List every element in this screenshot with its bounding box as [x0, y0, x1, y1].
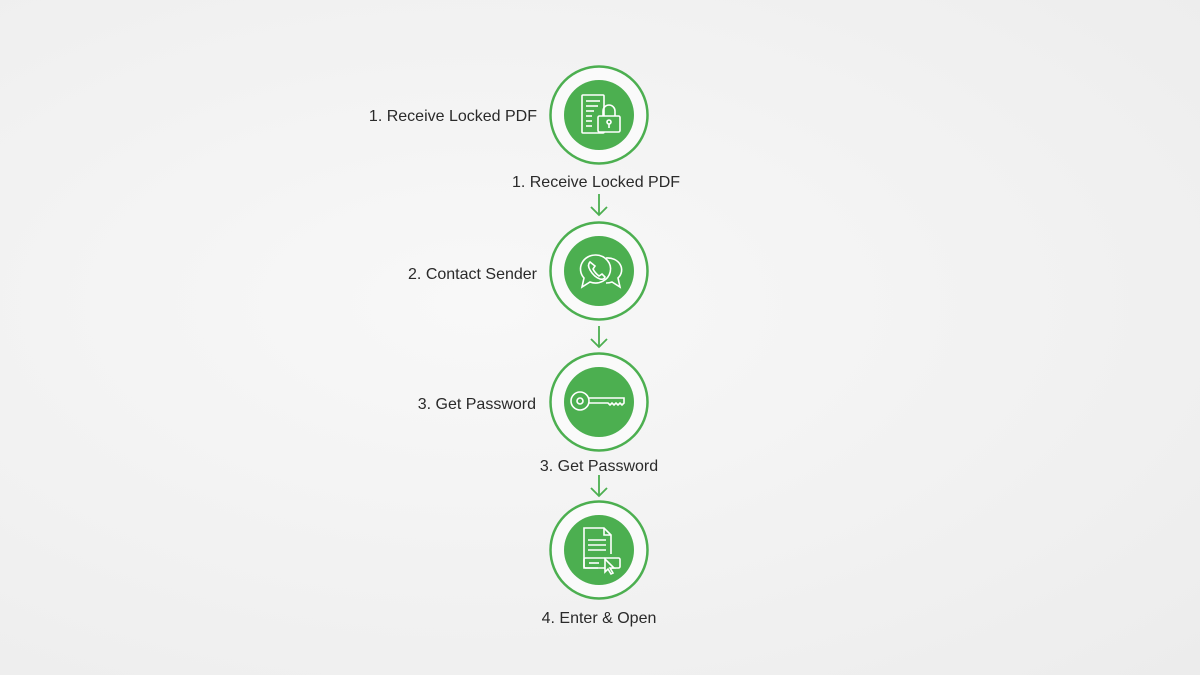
step 2: contact sender [408, 222, 648, 320]
label: step 2: 2. Contact Sender [408, 266, 538, 283]
arrow 3 [591, 475, 607, 496]
icon circle: locked document [550, 66, 648, 164]
label: step 3 left: 3. Get Password [418, 396, 536, 413]
label: step 4: 4. Enter & Open [542, 610, 656, 627]
icon circle: chat phone [550, 222, 648, 320]
label: step 1 below: 1. Receive Locked PDF [512, 174, 680, 191]
step 1: receive locked pdf [369, 66, 680, 191]
icon circle: key [550, 354, 648, 450]
arrow 2 [591, 326, 607, 347]
label: step 1 left: 1. Receive Locked PDF [369, 108, 537, 125]
label: step 3 below: 3. Get Password [540, 458, 658, 475]
step 3: get password [418, 354, 658, 475]
icon circle: document with cursor [550, 502, 648, 598]
step 4: enter & open [542, 502, 656, 627]
arrow 1 [591, 194, 607, 215]
